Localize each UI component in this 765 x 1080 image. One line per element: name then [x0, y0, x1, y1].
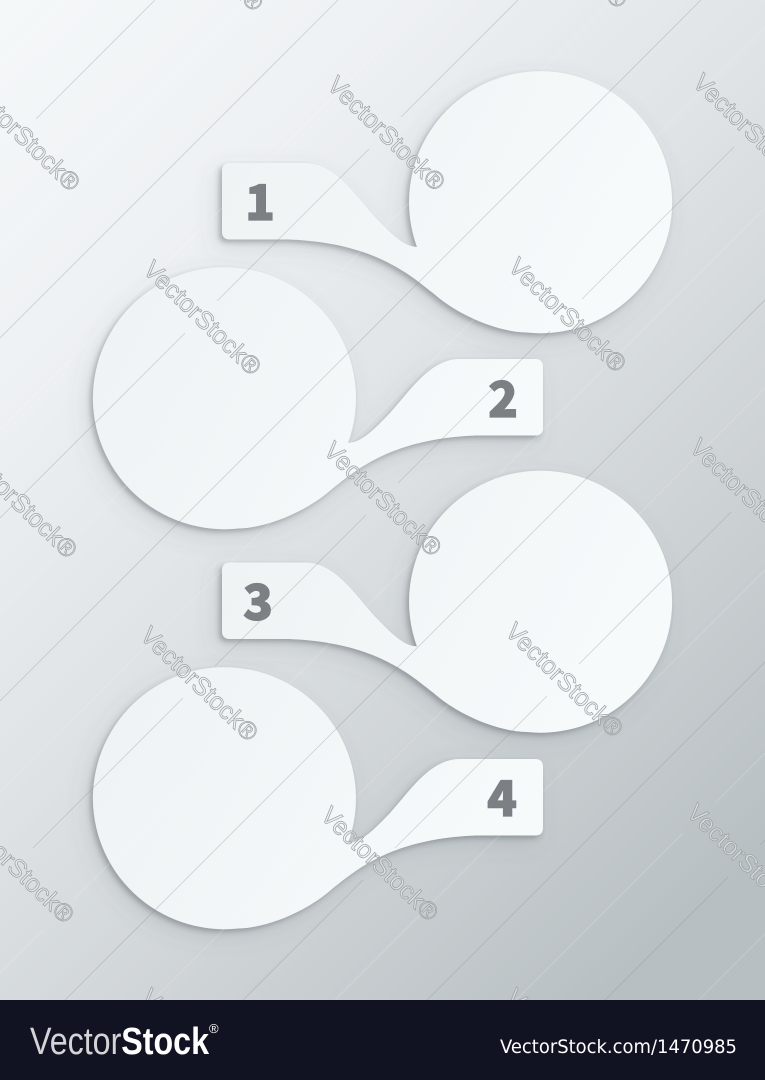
- number 1: 1: [245, 164, 275, 235]
- balloon 3: [222, 471, 672, 733]
- balloon 4: [93, 667, 543, 929]
- watermarks: VectorStock®: [135, 621, 264, 748]
- balloon 1: [222, 71, 672, 333]
- number 2: 2: [488, 361, 518, 432]
- watermarks: VectorStock®: [318, 436, 447, 563]
- footer bar: [0, 1000, 765, 1080]
- number 3: 3: [243, 564, 273, 635]
- registered mark: ®: [209, 1021, 219, 1036]
- watermarks: VectorStock®: [315, 801, 444, 928]
- image id: VectorStock.com/1470985: [500, 1036, 737, 1058]
- watermarks: VectorStock®: [503, 252, 632, 379]
- number 4: 4: [487, 760, 517, 831]
- balloon 2: [93, 267, 543, 529]
- watermarks: VectorStock®: [138, 255, 267, 382]
- footer logo: VectorStock: [30, 1021, 210, 1063]
- watermarks: VectorStock®: [322, 71, 451, 197]
- watermarks: VectorStock®: [500, 617, 629, 744]
